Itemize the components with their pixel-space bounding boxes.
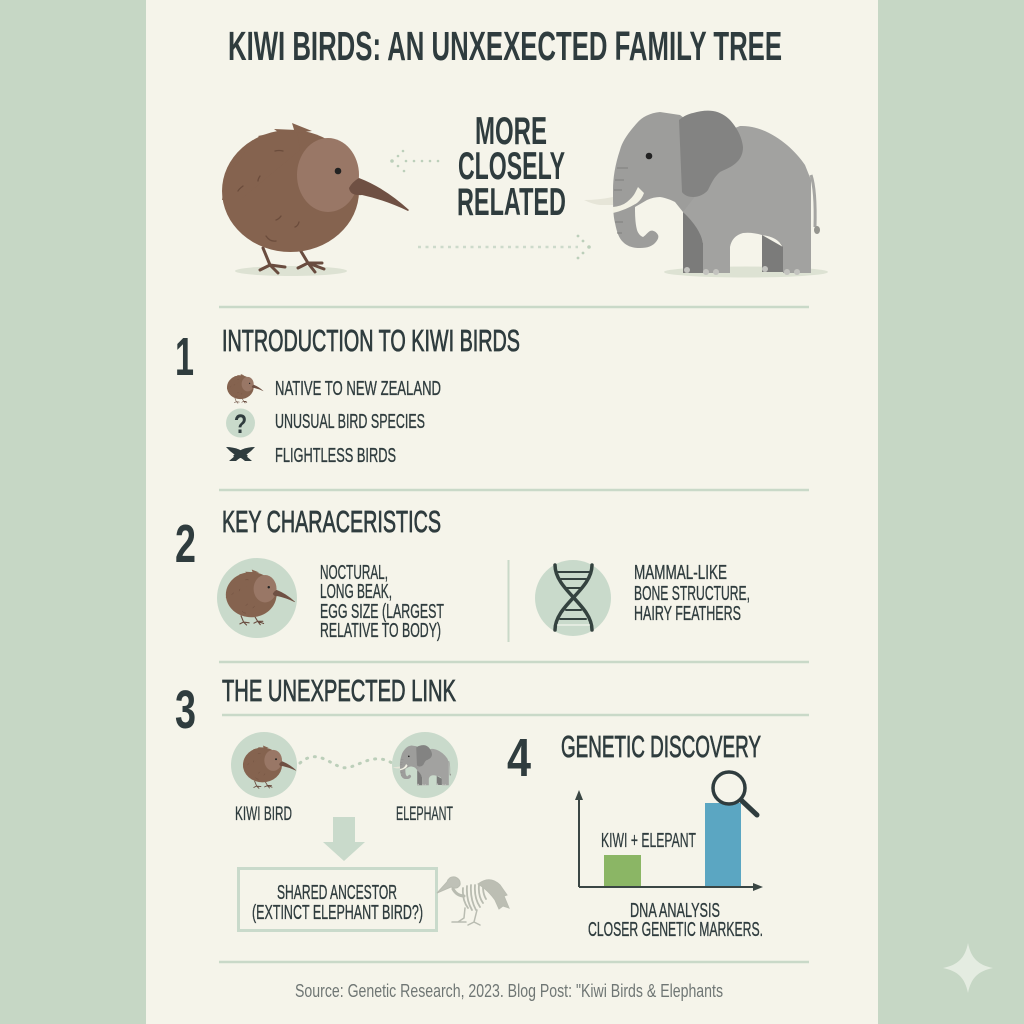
caption: DNA ANALYSIS: [630, 899, 720, 922]
heading: more closely related: RELATED: [457, 181, 566, 224]
section 2: key characteristics: [175, 504, 750, 642]
label: bar: KIWI + ELEPANT: [601, 830, 696, 852]
icon: kiwi in circle: [217, 558, 297, 638]
text: kiwi traits: NOCTURAL,: [320, 561, 388, 584]
text: mammal-like traits: HAIRY FEATHERS: [634, 602, 741, 625]
arrow: dotted arrow pointing to kiwi: [390, 150, 439, 172]
caption: [588, 899, 763, 941]
list item: FLIGHTLESS BIRDS: [275, 444, 396, 467]
list item: NATIVE TO NEW ZEALAND: [275, 377, 441, 400]
heading: more closely related: CLOSELY: [458, 145, 565, 188]
icon: question mark: [226, 408, 255, 440]
icon: bird skeleton: [437, 877, 509, 925]
heading: KEY CHARACERISTICS: [222, 504, 441, 539]
page background panel: [146, 0, 878, 1024]
icon: magnifying glass: [713, 772, 757, 815]
source line: Source: Genetic Research, 2023. Blog Post: "Kiwi Birds & Elephants: [295, 981, 723, 1001]
text: mammal-like traits: [634, 561, 750, 625]
caption: CLOSER GENETIC MARKERS.: [588, 918, 763, 941]
icon: kiwi in circle: [231, 732, 297, 798]
icon: small kiwi: [227, 374, 263, 403]
axes: [579, 796, 756, 887]
label: kiwi bird: KIWI BIRD: [235, 804, 292, 825]
heading: more closely related: [457, 110, 566, 224]
section 4: genetic discovery: [507, 728, 763, 941]
heading: THE UNEXPECTED LINK: [222, 673, 456, 708]
icon: elephant in circle: [392, 732, 458, 798]
number 4: 4: [507, 728, 531, 788]
icon: DNA helix in circle: [535, 560, 611, 636]
icon: crossed feathers: [226, 447, 255, 461]
box: shared ancestor: (EXTINCT ELEPHANT BIRD?): [252, 901, 423, 924]
list item: UNUSUAL BIRD SPECIES: [275, 410, 425, 433]
text: mammal-like traits: BONE STRUCTURE,: [634, 582, 750, 605]
box: shared ancestor: [238, 868, 436, 930]
section 1: introduction to kiwi birds: [175, 323, 520, 467]
number 1: 1: [175, 327, 194, 387]
bar chart: [575, 790, 763, 891]
illustration: kiwi bird: [222, 123, 409, 276]
bar: green: [604, 855, 641, 887]
number 2: 2: [175, 514, 196, 574]
text: kiwi traits: [320, 561, 444, 642]
text: kiwi traits: EGG SIZE (LARGEST: [320, 600, 444, 623]
arrow: down to ancestor: [323, 817, 365, 861]
text: mammal-like traits: MAMMAL-LIKE: [634, 561, 727, 584]
sparkle mark: [943, 943, 993, 993]
text: kiwi traits: RELATIVE TO BODY): [320, 619, 441, 642]
heading: INTRODUCTION TO KIWI BIRDS: [222, 323, 520, 358]
text: kiwi traits: LONG BEAK,: [320, 580, 392, 603]
label: elephant: ELEPHANT: [396, 804, 453, 825]
heading: more closely related: MORE: [475, 110, 547, 153]
illustration: elephant: [584, 111, 828, 278]
arrow: dotted arrow pointing to elephant: [418, 235, 591, 259]
number 3: 3: [175, 680, 196, 740]
heading: GENETIC DISCOVERY: [561, 729, 761, 764]
section 3: the unexpected link: [175, 673, 809, 930]
bar: blue: [705, 803, 741, 887]
box: shared ancestor: SHARED ANCESTOR: [277, 881, 397, 904]
icon: question mark: ?: [234, 410, 247, 440]
dotted connector: [300, 757, 392, 768]
